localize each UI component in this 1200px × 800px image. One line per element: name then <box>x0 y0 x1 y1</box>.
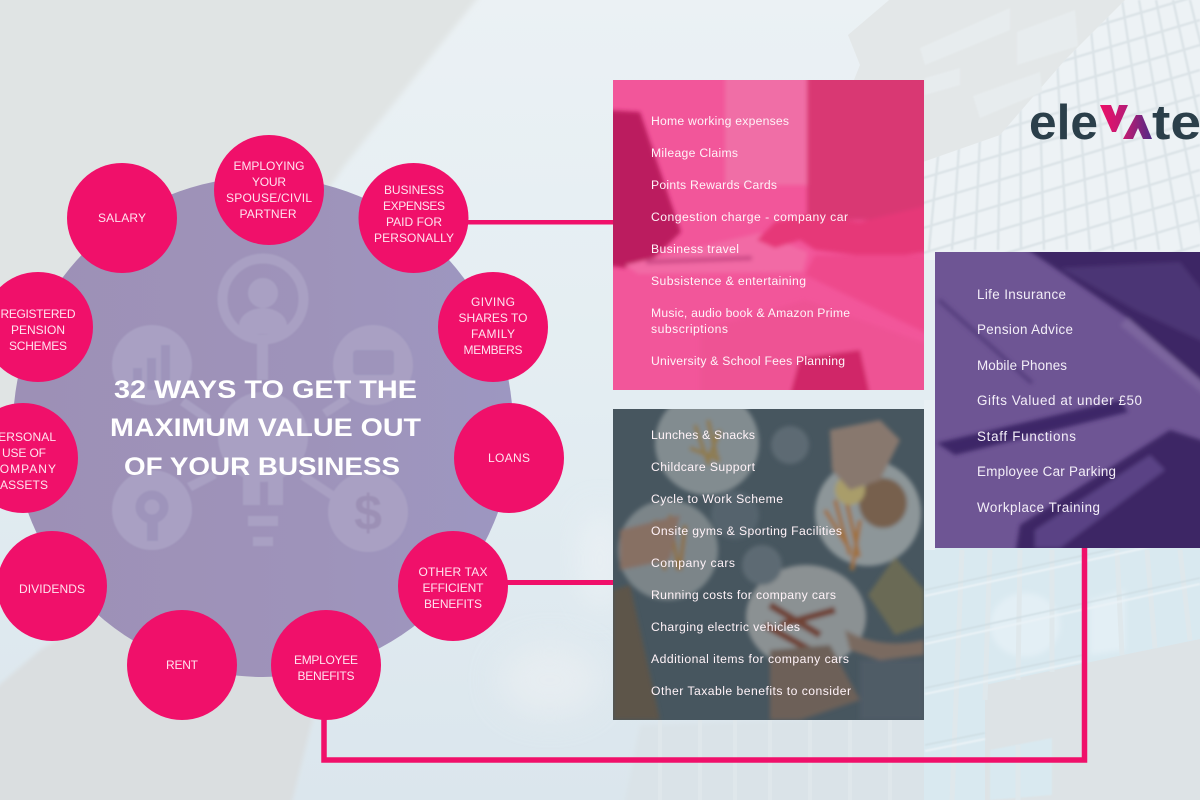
node: salary: SALARY <box>98 211 146 225</box>
node: business expenses: BUSINESS <box>384 183 444 197</box>
node: business expenses <box>358 163 468 273</box>
connector: other benefits to grey panel <box>505 580 615 585</box>
node: business expenses: PERSONALLY <box>374 231 454 245</box>
node: dividends <box>0 531 107 641</box>
list: employee benefits: Life Insurance <box>977 287 1066 302</box>
logo: elevate: te <box>1152 96 1200 150</box>
list: benefits: Other Taxable benefits to consider <box>651 684 851 698</box>
list: benefits: Childcare Support <box>651 460 756 474</box>
logo: elevate <box>1029 96 1200 150</box>
list: employee benefits: Mobile Phones <box>977 358 1067 373</box>
node: rent: RENT <box>166 658 199 672</box>
node: employing your spouse <box>214 135 324 245</box>
list: expenses: Mileage Claims <box>651 146 738 160</box>
list: expenses: Music, audio book & Amazon Prime <box>651 306 850 320</box>
node: employing your spouse: YOUR <box>252 175 286 189</box>
icon: logo inverted V mark <box>1123 115 1152 139</box>
list: expenses <box>651 114 850 368</box>
title: 32 WAYS TO GET THE <box>114 376 417 404</box>
node: loans <box>454 403 564 513</box>
icon: dollar sign: $ <box>354 485 382 541</box>
list: benefits <box>651 428 851 698</box>
node: personal use of company assets: ASSETS <box>0 478 48 492</box>
node: loans: LOANS <box>488 451 530 465</box>
node: dividends: DIVIDENDS <box>19 582 85 596</box>
list: expenses: Points Rewards Cards <box>651 178 777 192</box>
node: giving shares: SHARES TO <box>458 311 528 325</box>
list: benefits: Onsite gyms & Sporting Facilities <box>651 524 842 538</box>
title: MAXIMUM VALUE OUT <box>110 414 421 442</box>
node: employee benefits <box>271 610 381 720</box>
logo: elevate: ele <box>1029 96 1098 150</box>
list: expenses: Subsistence & entertaining <box>651 274 806 288</box>
list: expenses: University & School Fees Planning <box>651 354 845 368</box>
connector: business expenses to pink panel <box>465 220 615 224</box>
list: expenses: Home working expenses <box>651 114 789 128</box>
list: expenses: Congestion charge - company car <box>651 210 848 224</box>
title <box>110 376 421 481</box>
node: giving shares: MEMBERS <box>464 343 522 357</box>
node: registered pension schemes <box>0 272 93 382</box>
list: benefits: Company cars <box>651 556 735 570</box>
title: OF YOUR BUSINESS <box>124 453 400 481</box>
list: expenses: Business travel <box>651 242 739 256</box>
node: other tax efficient benefits: OTHER TAX <box>418 565 488 579</box>
node: rent <box>127 610 237 720</box>
node: personal use of company assets: USE OF <box>2 446 46 460</box>
node: registered pension schemes: REGISTERED <box>0 307 76 321</box>
panel: employee benefits (purple) <box>935 245 1200 555</box>
node: employing your spouse: PARTNER <box>240 207 297 221</box>
watermark icons <box>112 258 413 552</box>
list: employee benefits: Employee Car Parking <box>977 464 1116 479</box>
node: giving shares: GIVING <box>471 295 515 309</box>
node: registered pension schemes: SCHEMES <box>9 339 67 353</box>
node: business expenses: PAID FOR <box>386 215 442 229</box>
panel: expenses (pink) <box>613 80 924 390</box>
node: business expenses: EXPENSES <box>383 199 445 213</box>
node: employee benefits: BENEFITS <box>298 669 354 683</box>
list: benefits: Lunches & Snacks <box>651 428 755 442</box>
node: giving shares: FAMILY <box>471 327 515 341</box>
list: benefits: Cycle to Work Scheme <box>651 492 783 506</box>
node: registered pension schemes: PENSION <box>11 323 65 337</box>
node: employee benefits: EMPLOYEE <box>294 653 358 667</box>
icon: logo V mark <box>1100 105 1128 132</box>
building, top right <box>848 0 1135 260</box>
list: benefits: Running costs for company cars <box>651 588 836 602</box>
list: employee benefits: Staff Functions <box>977 429 1076 444</box>
node: giving shares <box>438 272 548 382</box>
connector: employee benefits to purple panel <box>324 548 1084 760</box>
list: employee benefits: Workplace Training <box>977 500 1100 515</box>
node: other tax efficient benefits <box>398 531 508 641</box>
list: employee benefits <box>977 287 1142 515</box>
node: employing your spouse: SPOUSE/CIVIL <box>226 191 312 205</box>
list: expenses: subscriptions <box>651 322 728 336</box>
node: salary <box>67 163 177 273</box>
node: personal use of company assets <box>0 403 78 513</box>
list: employee benefits: Pension Advice <box>977 322 1073 337</box>
node: employing your spouse: EMPLOYING <box>234 159 304 173</box>
node: other tax efficient benefits: BENEFITS <box>424 597 482 611</box>
building, bottom right <box>924 548 1200 753</box>
central purple disc <box>13 177 513 677</box>
list: employee benefits: Gifts Valued at under £50 <box>977 393 1142 408</box>
panel: other tax efficient benefits (grey) <box>613 391 924 720</box>
window patches on upper grey façade <box>920 8 1078 118</box>
list: benefits: Additional items for company cars <box>651 652 849 666</box>
list: benefits: Charging electric vehicles <box>651 620 800 634</box>
node: other tax efficient benefits: EFFICIENT <box>422 581 484 595</box>
